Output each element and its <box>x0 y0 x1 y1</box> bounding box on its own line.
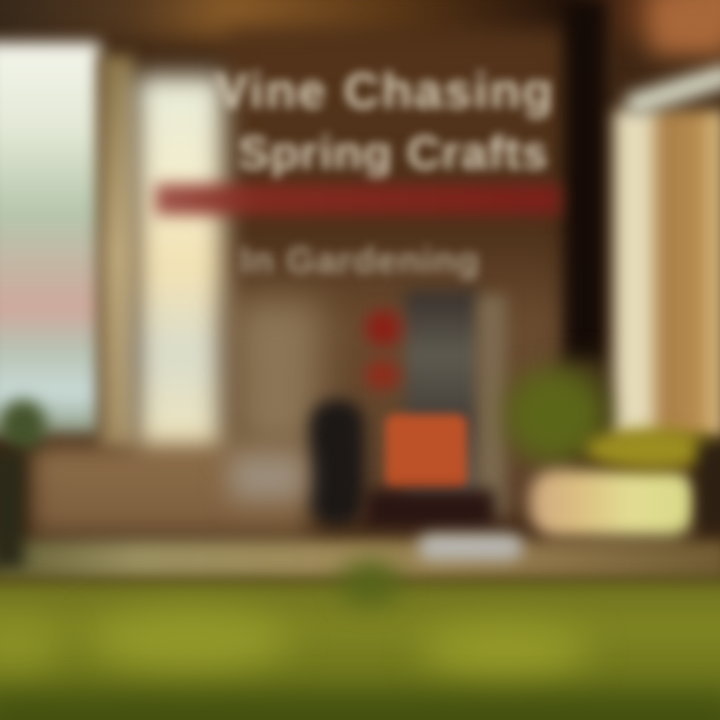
right strip <box>478 295 506 515</box>
lower wall <box>30 445 310 537</box>
right window frame <box>624 62 720 118</box>
red banner <box>155 184 560 215</box>
right roof <box>650 0 720 55</box>
plant: right leaves <box>585 428 720 470</box>
title line 1: Vine Chasing <box>215 63 555 119</box>
plant: center right <box>505 368 605 463</box>
grass highlight mid <box>0 620 60 670</box>
ledge <box>0 540 720 580</box>
dark lower section <box>560 360 620 440</box>
panel: right window <box>614 110 720 440</box>
light left column <box>235 300 320 450</box>
dark figure <box>310 400 364 525</box>
heading <box>144 63 570 285</box>
subtitle: In Gardening <box>240 240 480 281</box>
grass tuft <box>340 560 400 605</box>
panel: left window <box>0 42 100 434</box>
dark text block <box>405 290 480 505</box>
plant: left <box>0 400 46 450</box>
grass <box>0 580 720 720</box>
orange box <box>385 414 467 490</box>
back wall <box>225 30 570 520</box>
light patch <box>230 455 305 500</box>
dark base <box>365 490 495 528</box>
white paper on ledge <box>418 534 523 560</box>
grass shadow bottom <box>0 698 720 720</box>
grass highlight left <box>90 610 290 670</box>
dark pot right <box>697 440 720 530</box>
panel: central list <box>212 280 512 520</box>
grass highlight right <box>420 625 590 675</box>
red accent upper <box>365 310 401 346</box>
red accent lower <box>365 360 399 390</box>
ceiling <box>0 0 720 40</box>
pillar <box>100 55 134 450</box>
pot: left <box>0 450 24 568</box>
dark column <box>565 0 605 370</box>
pot: right <box>530 470 696 536</box>
title line 2: Spring Crafts <box>238 126 549 179</box>
panel: middle window <box>136 75 224 460</box>
